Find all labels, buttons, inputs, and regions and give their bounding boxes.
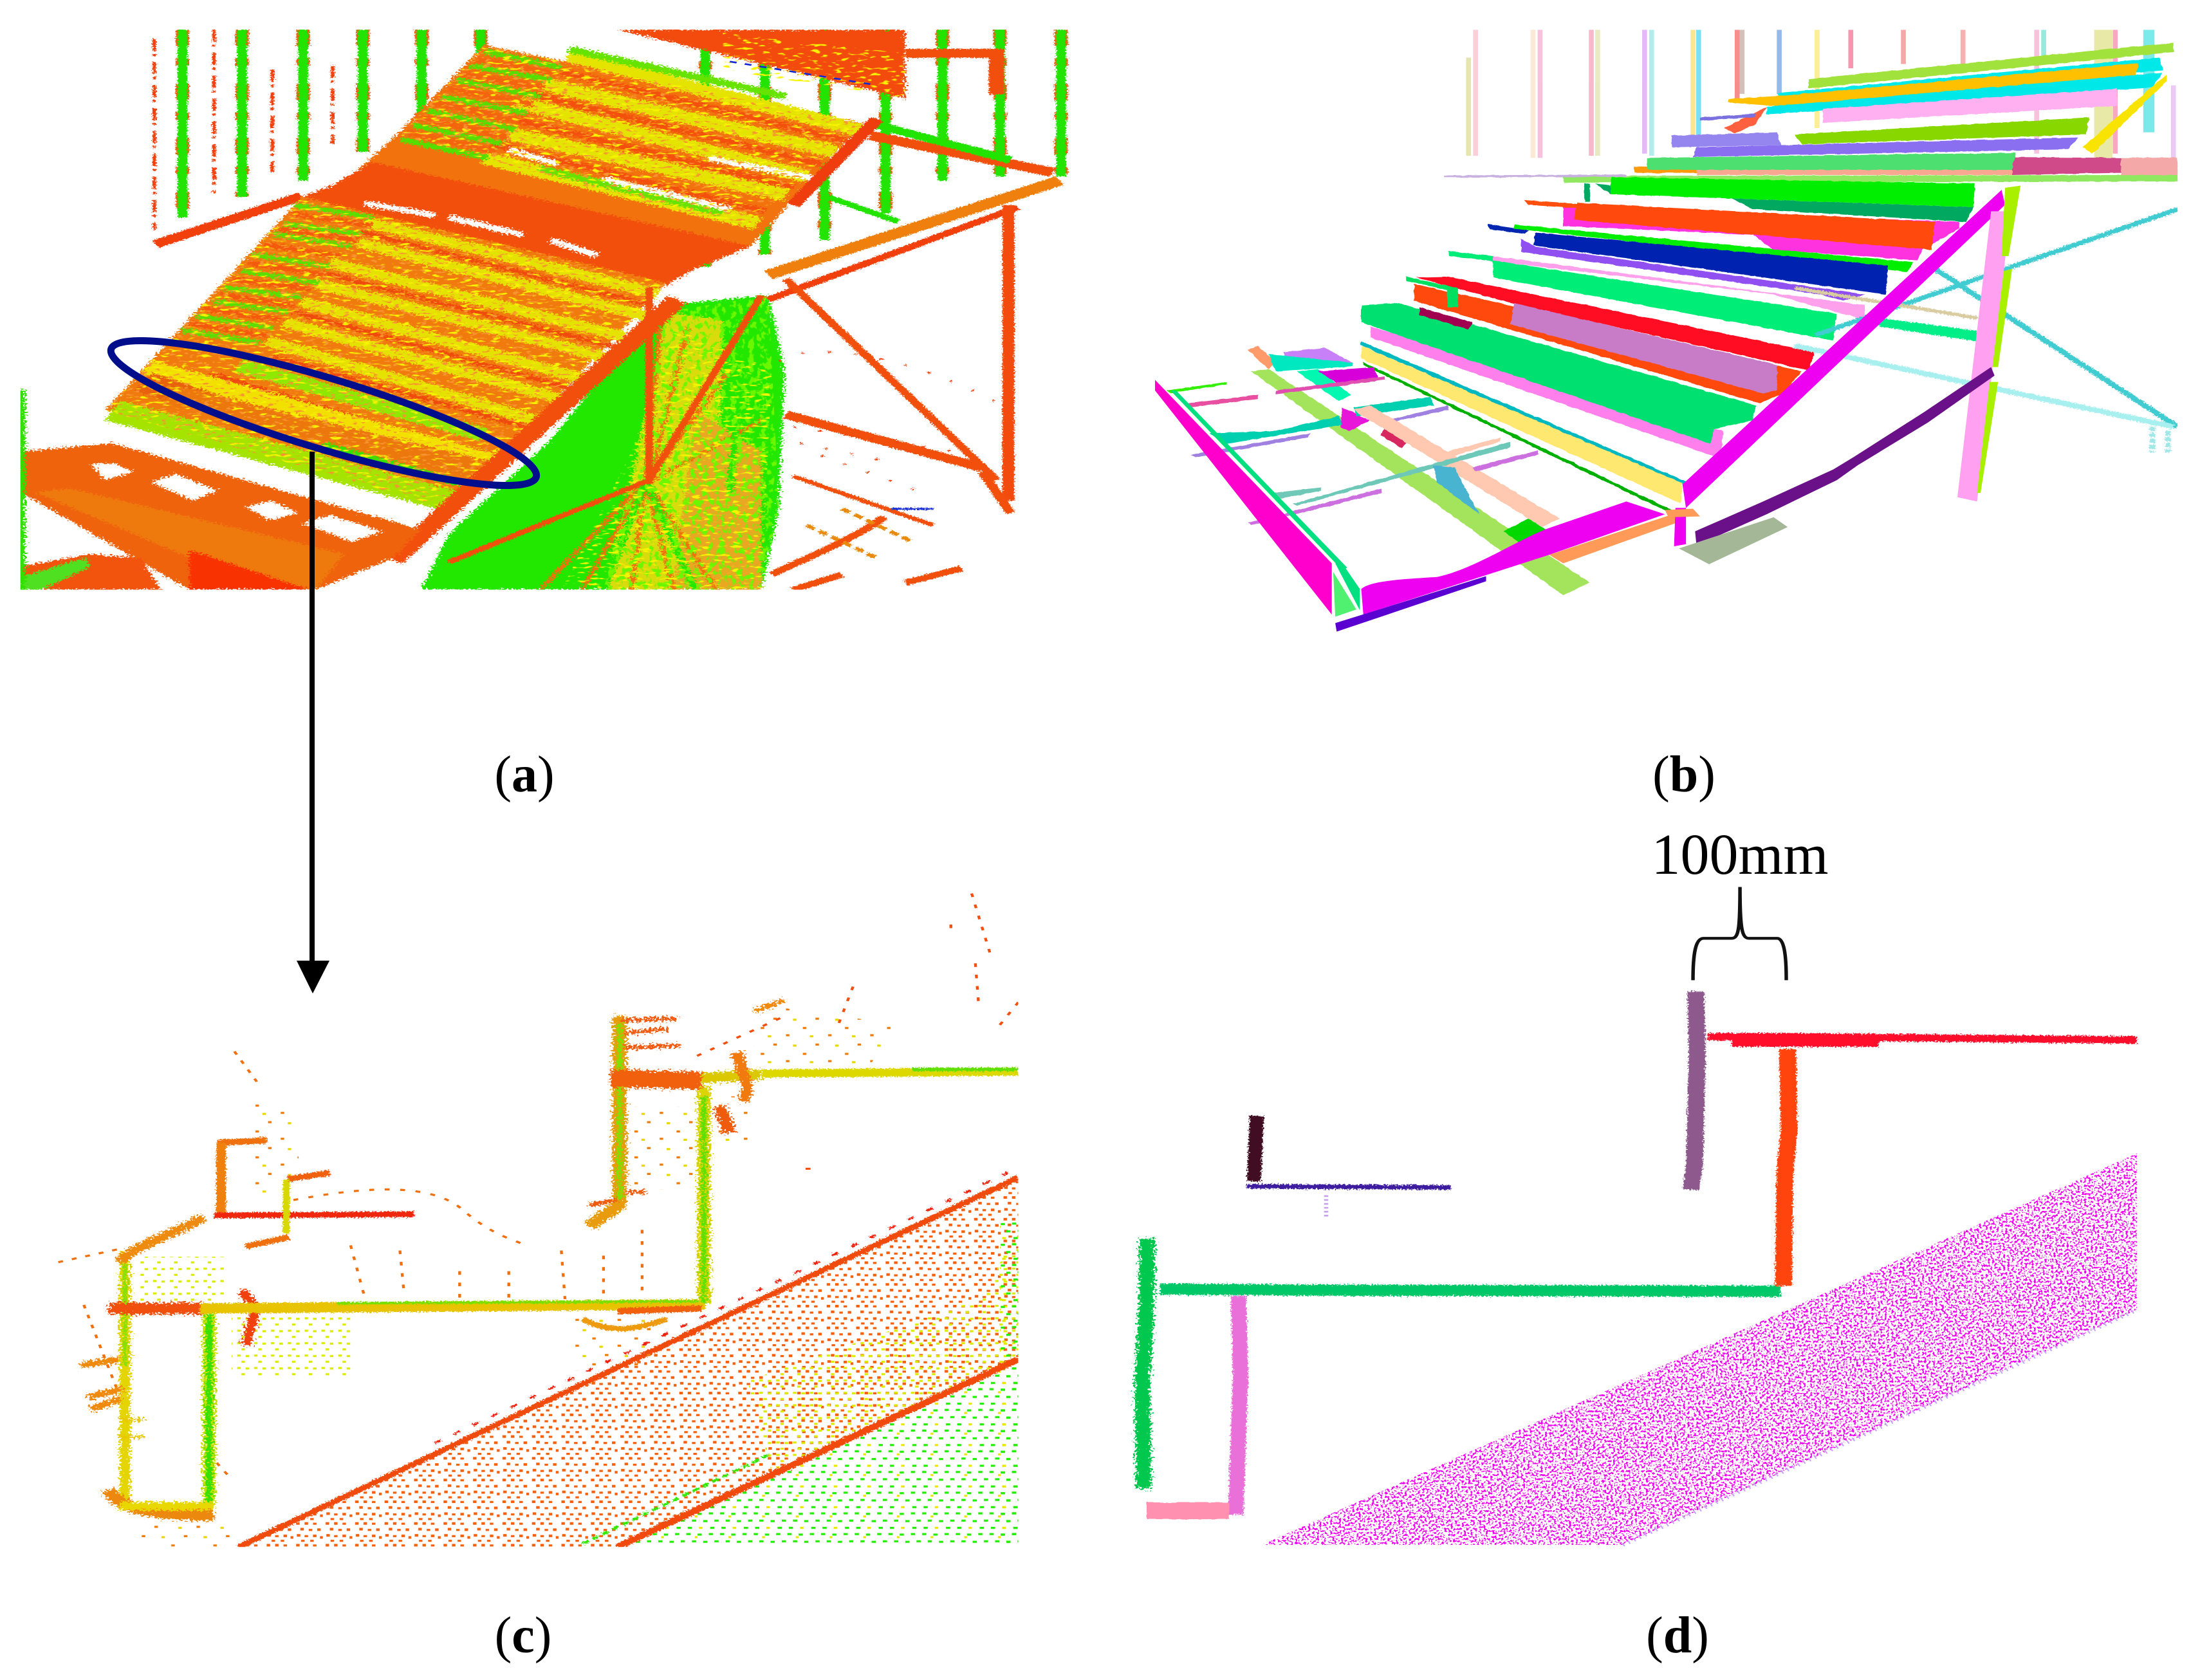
panel c: cross-section of raw point cloud bbox=[60, 894, 1018, 1547]
panel a: coloured point cloud of the staircase bbox=[21, 30, 1061, 590]
sloped stringer point fill bbox=[239, 1174, 1018, 1547]
upper flight texture bbox=[400, 33, 905, 230]
tread: bright green bbox=[1584, 177, 1975, 222]
upper stair flight bbox=[302, 30, 905, 285]
bottom magenta side plates bbox=[1155, 380, 1700, 632]
stringer edges bbox=[239, 1168, 1018, 1547]
faint dots bbox=[1324, 1195, 1328, 1217]
speckled magenta stringer plane bbox=[1262, 1153, 2137, 1545]
tread: navy blue bbox=[1488, 224, 1914, 301]
green mesh side wall bbox=[421, 295, 784, 590]
cyan cross braces bbox=[1795, 209, 2177, 452]
tread: green and pink bbox=[1361, 303, 1756, 459]
column planes bbox=[1957, 186, 2020, 501]
middle tread section bbox=[200, 1301, 705, 1329]
magenta stringer bbox=[1683, 190, 2005, 508]
tread: yellow bbox=[1360, 342, 1686, 512]
tread: orange-red bbox=[1524, 199, 1959, 261]
label (b): (b) bbox=[1652, 746, 1715, 803]
label (c): (c) bbox=[495, 1607, 551, 1664]
faint railing planes bbox=[1468, 30, 2174, 158]
dark purple curved brace bbox=[1695, 367, 1995, 546]
navy short tread bbox=[1246, 1186, 1451, 1187]
left lower rail bbox=[156, 196, 302, 244]
orange riser line bbox=[1784, 1049, 1789, 1286]
railing posts bbox=[154, 30, 1061, 267]
upper step section bbox=[214, 1140, 414, 1246]
left wall section bbox=[80, 1218, 256, 1515]
panel b: segmented planes of the staircase bbox=[1155, 30, 2177, 632]
brace bracket for 100mm bbox=[1693, 887, 1786, 980]
tread: mint green bbox=[1448, 251, 1865, 340]
lower flight texture bbox=[106, 197, 667, 509]
mauve riser line bbox=[1691, 992, 1697, 1190]
bottom landing frame bbox=[1167, 346, 1590, 595]
lower deck beams bbox=[21, 390, 421, 590]
red top tread line bbox=[1708, 1037, 2137, 1041]
tread: red and mauve bbox=[1405, 277, 1815, 403]
grey-green floor patch bbox=[1679, 517, 1788, 564]
scattered noise points bbox=[60, 894, 1017, 1547]
green left riser line bbox=[1142, 1239, 1147, 1488]
side wall texture bbox=[449, 287, 779, 590]
panel d: segmented cross-section bbox=[1142, 887, 2137, 1545]
dark short riser bbox=[1254, 1116, 1257, 1181]
green middle tread line bbox=[1160, 1289, 1780, 1291]
main stringer bbox=[393, 300, 677, 560]
highlight ellipse bbox=[101, 315, 546, 511]
lower stair flight with treads bbox=[106, 197, 667, 509]
arrow from panel a to panel c bbox=[297, 452, 329, 993]
right riser section bbox=[589, 1001, 784, 1304]
pink riser line bbox=[1235, 1296, 1241, 1515]
label (a): (a) bbox=[494, 746, 555, 803]
label (d): (d) bbox=[1646, 1607, 1709, 1664]
right platform frame bbox=[768, 53, 1060, 525]
upper flight planes bbox=[1444, 42, 2177, 183]
scattered floor debris bbox=[772, 352, 1010, 590]
pink bottom tread block bbox=[1147, 1502, 1230, 1519]
upper tread line bbox=[761, 1069, 1018, 1073]
dimension label 100mm: 100mm bbox=[1651, 823, 1829, 887]
